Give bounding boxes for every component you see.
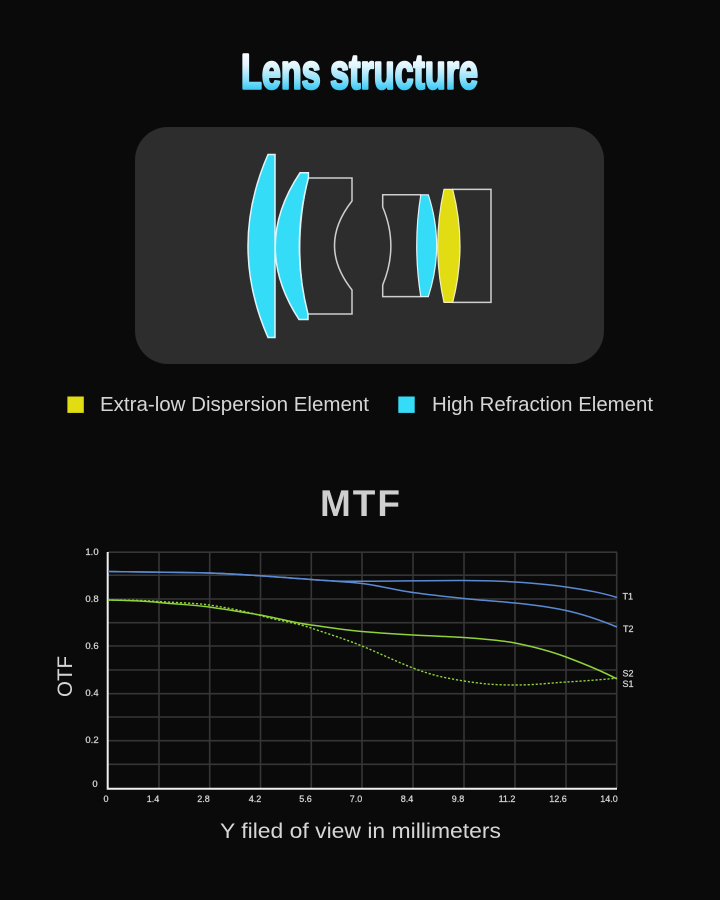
- heading: MTF: MTF: [320, 483, 400, 524]
- lens element 1: high refraction: [248, 154, 275, 338]
- curve labels: T1: [622, 592, 633, 602]
- x axis tick labels: [103, 794, 618, 804]
- panel background: [135, 127, 604, 364]
- legend: [67, 394, 653, 416]
- x axis tick labels: 0: [103, 794, 109, 804]
- title: Lens structure: [241, 46, 478, 100]
- curve labels: S2: [622, 668, 634, 678]
- panel: lens diagram: [135, 127, 604, 364]
- legend label: high refraction: High Refraction Element: [432, 394, 653, 416]
- y axis tick labels: 0.4: [85, 688, 99, 699]
- curve labels: [622, 592, 634, 689]
- x axis tick labels: 5.6: [299, 794, 312, 804]
- x axis tick labels: 8.4: [401, 794, 413, 804]
- curve S1: [108, 600, 617, 685]
- lens element 2: high refraction: [275, 173, 308, 320]
- curve labels: T2: [623, 624, 634, 634]
- x axis tick labels: 14.0: [600, 794, 618, 804]
- legend label: extra-low dispersion: Extra-low Dispersion Element: [100, 394, 369, 416]
- y axis tick labels: 1.0: [85, 547, 99, 558]
- lens element 7: outline block: [452, 189, 491, 302]
- x axis title: Y filed of view in millimeters: [220, 820, 501, 843]
- lens element 5: high refraction: [417, 195, 437, 297]
- legend swatch: high refraction: [398, 396, 415, 413]
- lens element 4: concave outline: [383, 195, 421, 297]
- y axis tick labels: 0.8: [85, 594, 99, 605]
- x axis tick labels: 11.2: [499, 794, 515, 804]
- y axis tick labels: 0.6: [85, 641, 99, 652]
- x axis tick labels: 9.8: [452, 794, 464, 804]
- legend swatch: extra-low dispersion: [67, 396, 84, 413]
- x axis tick labels: 4.2: [249, 794, 261, 804]
- chart: MTF line chart: [85, 547, 634, 804]
- y axis tick labels: [85, 547, 99, 790]
- x axis tick labels: 7.0: [350, 794, 362, 804]
- lens element 6: extra-low dispersion: [438, 189, 460, 302]
- chart grid: [108, 552, 617, 788]
- y axis title: OTF: [54, 656, 77, 697]
- lens element 3: concave outline: [300, 178, 352, 314]
- curve T2: [108, 572, 617, 627]
- x axis tick labels: 12.6: [549, 794, 567, 804]
- curve S2: [108, 600, 617, 679]
- chart axes: [108, 552, 617, 789]
- curve labels: S1: [622, 679, 634, 689]
- x axis tick labels: 2.8: [197, 794, 210, 804]
- x axis tick labels: 1.4: [147, 794, 159, 804]
- curve T1: [108, 572, 617, 598]
- y axis tick labels: 0: [92, 779, 98, 790]
- y axis tick labels: 0.2: [85, 735, 99, 746]
